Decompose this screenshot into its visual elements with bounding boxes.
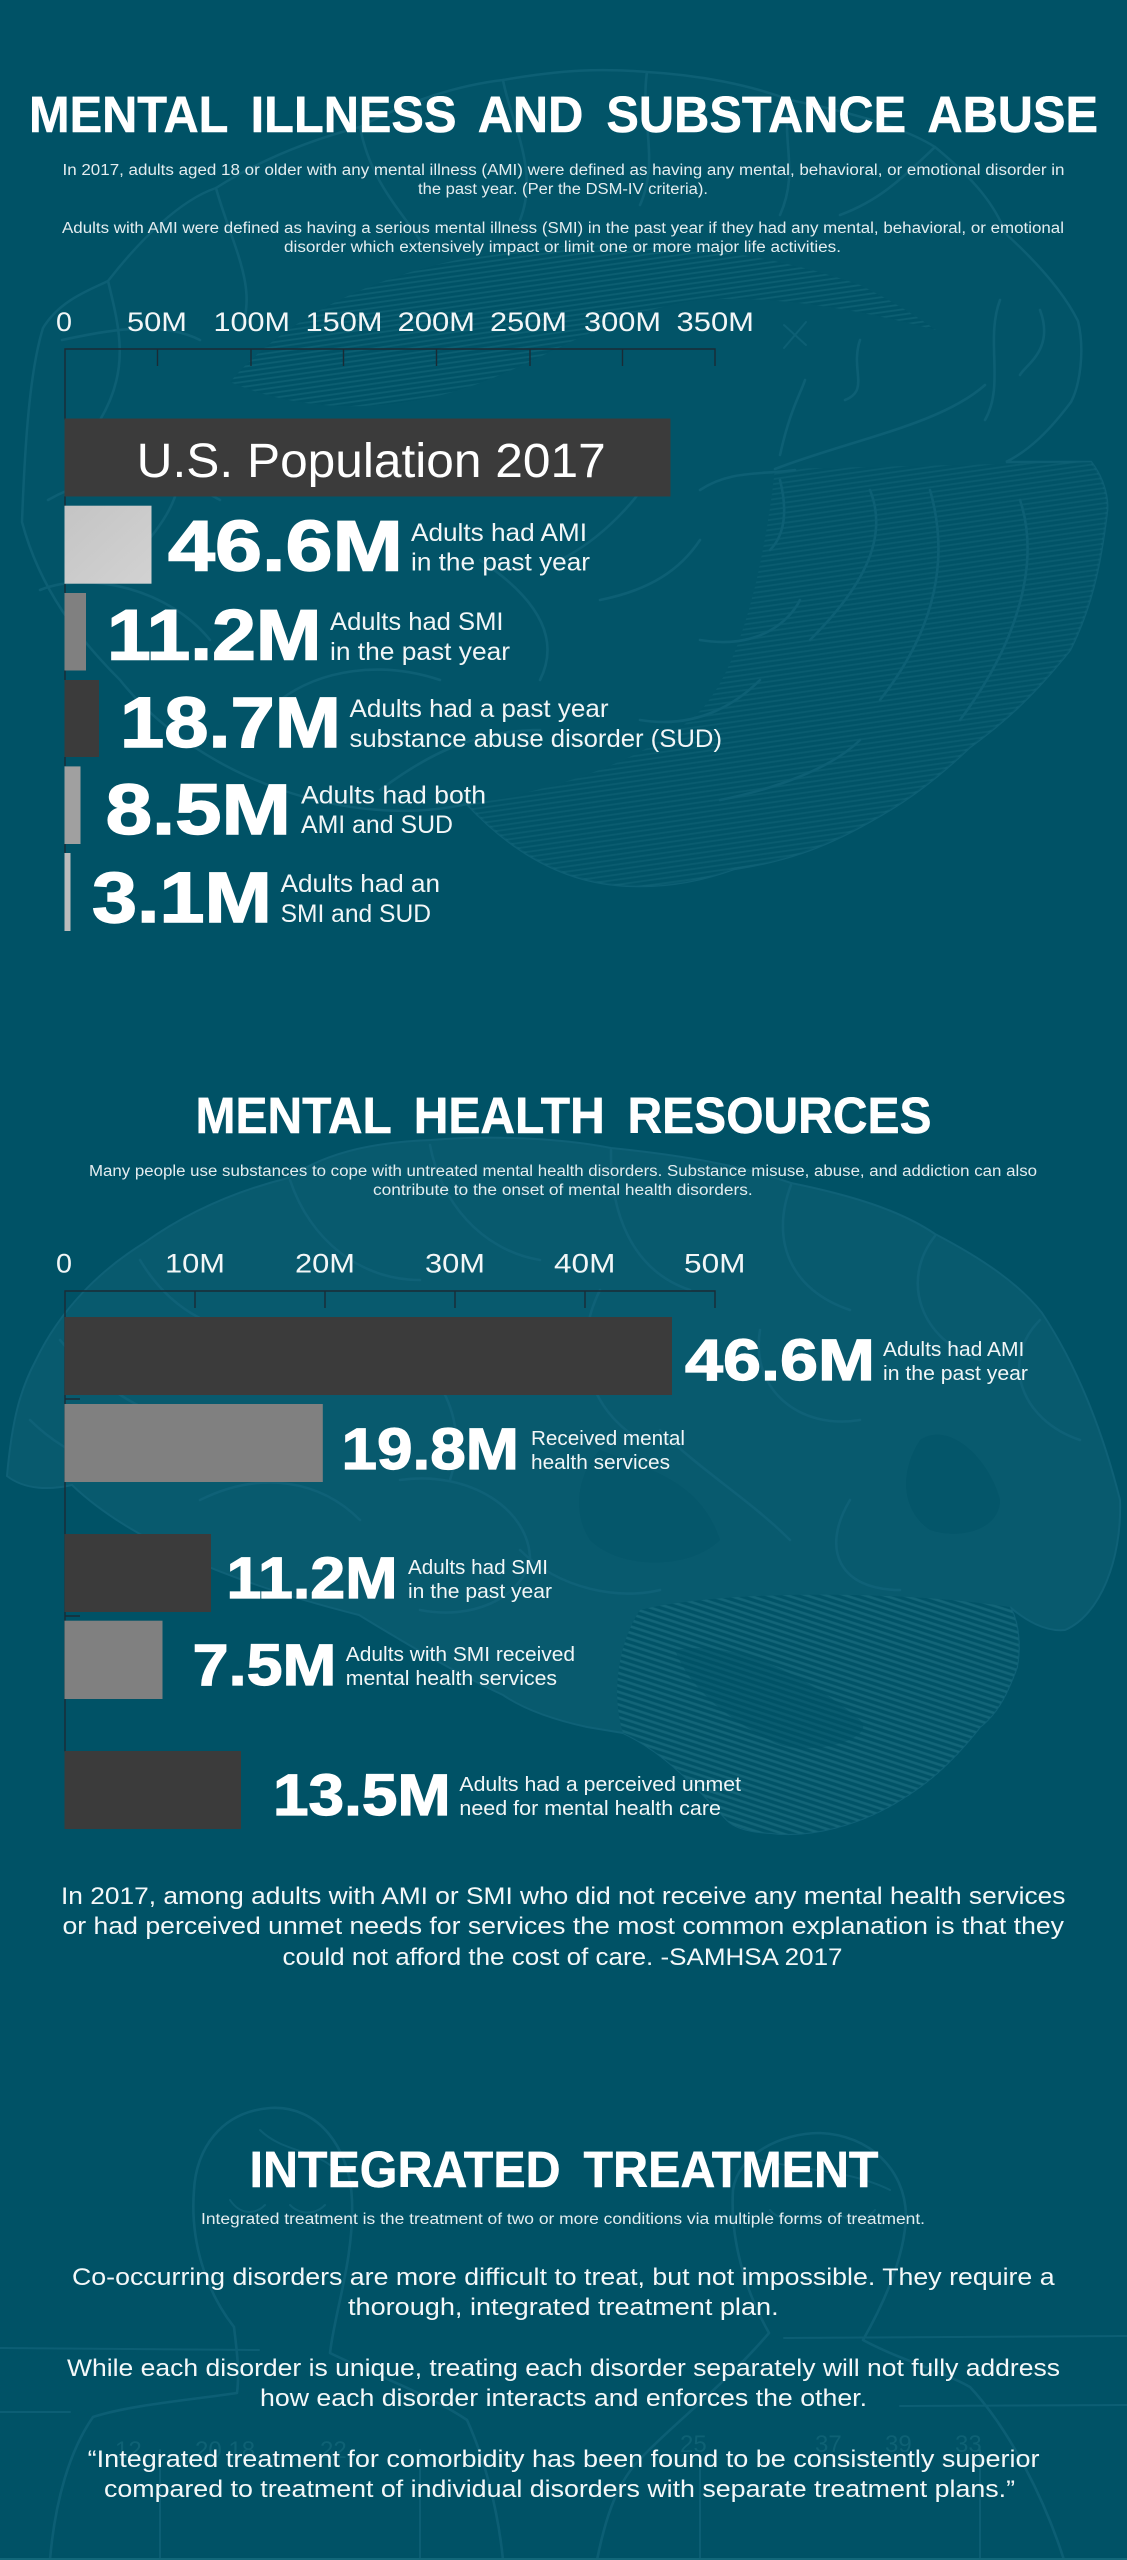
illustration: two engraved figures, section three: 37 bbox=[815, 2431, 842, 2458]
illustration: two engraved figures, section three: 25 bbox=[680, 2431, 707, 2458]
chart axis: adults scale: 10M bbox=[165, 1249, 225, 1279]
bar: U.S. population 2017 bbox=[64, 418, 670, 496]
heading: mental health resources: MENTAL HEALTH RESOURCES bbox=[196, 1087, 932, 1144]
bar: 46.6M adults had AMI bbox=[64, 506, 590, 586]
text block: AMI and SMI definitions: the past year. (Per the DSM-IV criteria). bbox=[418, 181, 708, 198]
quote: integrated treatment superiority: compared to treatment of individual disorders with separate treatment plans.” bbox=[104, 2476, 1015, 2503]
bar: 46.6M adults had AMI: 46.6M bbox=[685, 1328, 875, 1393]
chart axis: adults scale: 40M bbox=[554, 1249, 615, 1279]
chart axis: population scale: 150M bbox=[306, 307, 382, 337]
heading: integrated treatment: INTEGRATED TREATMENT bbox=[250, 2141, 878, 2198]
quote: integrated treatment superiority: “Integrated treatment for comorbidity has been found to be consistently superior bbox=[88, 2446, 1039, 2473]
bar: 11.2M adults had SMI: 11.2M bbox=[107, 596, 322, 676]
bar: 3.1M SMI and SUD: Adults had an bbox=[281, 870, 440, 898]
text block: substance use and mental health bbox=[89, 1163, 1037, 1199]
chart axis: population scale: 50M bbox=[127, 307, 187, 337]
illustration: two engraved figures, section three: 12 bbox=[115, 2437, 142, 2464]
chart axis: adults scale: 50M bbox=[684, 1249, 746, 1279]
text block: co-occurring disorders: Co-occurring disorders are more difficult to treat, but not impossible. They require a bbox=[72, 2264, 1055, 2291]
bar: 13.5M perceived unmet need bbox=[64, 1751, 741, 1829]
bar: 19.8M received mental health services: Received mental bbox=[531, 1427, 685, 1450]
bar: 8.5M both AMI and SUD: Adults had both bbox=[301, 782, 486, 810]
text block: substance use and mental health: Many people use substances to cope with untreated mental health disorders. Substance misuse, abuse, and addiction can also bbox=[89, 1163, 1037, 1180]
heading: mental illness and substance abuse: MENTAL ILLNESS AND SUBSTANCE ABUSE bbox=[29, 86, 1098, 143]
text block: AMI and SMI definitions bbox=[62, 162, 1064, 256]
bar: 7.5M adults with SMI received services: 7.5M bbox=[193, 1633, 336, 1698]
bar: 7.5M adults with SMI received services: mental health services bbox=[346, 1667, 557, 1690]
chart axis: adults scale: 20M bbox=[295, 1249, 355, 1279]
bar: 18.7M substance abuse disorder: Adults had a past year bbox=[350, 695, 608, 723]
bar: 3.1M SMI and SUD bbox=[64, 853, 440, 938]
chart axis: population scale: 250M bbox=[490, 307, 567, 337]
bar: 46.6M adults had AMI bbox=[64, 1317, 1028, 1395]
bar: 11.2M adults had SMI: Adults had SMI bbox=[408, 1556, 548, 1579]
bar: 46.6M adults had AMI: 46.6M bbox=[168, 508, 403, 586]
panel: integrated treatment bbox=[67, 2141, 1060, 2503]
chart axis: population scale bbox=[56, 307, 754, 853]
bar: 7.5M adults with SMI received services bbox=[64, 1621, 575, 1699]
text block: treating disorders separately: While each disorder is unique, treating each disorder separately will not fully address bbox=[67, 2355, 1060, 2382]
bar: 3.1M SMI and SUD: 3.1M bbox=[92, 859, 272, 938]
illustration: two engraved figures, section three: 39 bbox=[885, 2431, 912, 2458]
bar: 11.2M adults had SMI: Adults had SMI bbox=[330, 608, 504, 636]
bar: 3.1M SMI and SUD: SMI and SUD bbox=[281, 900, 431, 928]
illustration: two engraved figures, section three: 33 bbox=[955, 2431, 982, 2458]
text block: co-occurring disorders: thorough, integrated treatment plan. bbox=[348, 2294, 779, 2321]
bar: 8.5M both AMI and SUD bbox=[64, 766, 486, 850]
bar: 46.6M adults had AMI: Adults had AMI bbox=[883, 1338, 1024, 1361]
illustration: engraved brain, section two bbox=[7, 1138, 1120, 1834]
chart axis: adults scale: 30M bbox=[425, 1249, 485, 1279]
panel: mental illness and substance abuse bbox=[29, 86, 1098, 938]
chart axis: population scale: 350M bbox=[676, 307, 754, 337]
panel: mental health resources bbox=[56, 1087, 1065, 1971]
bar: 46.6M adults had AMI: in the past year bbox=[883, 1362, 1028, 1385]
bar: 19.8M received mental health services bbox=[64, 1404, 685, 1482]
text block: SAMHSA cost of care finding: In 2017, among adults with AMI or SMI who did not receive any mental health services bbox=[61, 1883, 1065, 1910]
bar: 19.8M received mental health services: health services bbox=[531, 1451, 670, 1474]
bar: 46.6M adults had AMI: Adults had AMI bbox=[411, 519, 587, 547]
text block: AMI and SMI definitions: disorder which extensively impact or limit one or more major life activities. bbox=[284, 239, 841, 256]
bar: 13.5M perceived unmet need: need for mental health care bbox=[459, 1797, 721, 1820]
illustration: two engraved figures, section three bbox=[0, 2108, 1127, 2560]
text block: co-occurring disorders bbox=[72, 2264, 1055, 2321]
bar: 18.7M substance abuse disorder: substance abuse disorder (SUD) bbox=[350, 725, 722, 753]
bar: 11.2M adults had SMI bbox=[64, 1534, 552, 1612]
chart axis: population scale: 300M bbox=[584, 307, 661, 337]
chart axis: adults scale bbox=[56, 1249, 746, 1752]
bar: 7.5M adults with SMI received services: Adults with SMI received bbox=[346, 1643, 575, 1666]
illustration: engraved brain, section one bbox=[22, 70, 1107, 886]
bar: 18.7M substance abuse disorder: 18.7M bbox=[120, 684, 341, 763]
chart axis: population scale: 200M bbox=[398, 307, 475, 337]
bar: 8.5M both AMI and SUD: AMI and SUD bbox=[301, 811, 453, 839]
quote: integrated treatment superiority bbox=[88, 2446, 1039, 2503]
bar: 11.2M adults had SMI bbox=[64, 593, 510, 676]
bar: 13.5M perceived unmet need: Adults had a perceived unmet bbox=[459, 1773, 741, 1796]
text block: integrated treatment definition: Integrated treatment is the treatment of two or more conditions via multiple forms of treatment. bbox=[201, 2211, 925, 2228]
text block: SAMHSA cost of care finding: or had perceived unmet needs for services the most common explanation is that they bbox=[62, 1913, 1065, 1940]
bar: 11.2M adults had SMI: in the past year bbox=[330, 638, 510, 666]
text block: AMI and SMI definitions: In 2017, adults aged 18 or older with any mental illness (AMI) were defined as having any mental, behavioral, or emotional disorder in bbox=[62, 162, 1064, 179]
bar: U.S. population 2017: U.S. Population 2017 bbox=[137, 435, 606, 488]
bar: 11.2M adults had SMI: 11.2M bbox=[226, 1546, 398, 1611]
chart axis: population scale: 100M bbox=[214, 307, 290, 337]
illustration: two engraved figures, section three: 20 18 bbox=[195, 2437, 255, 2464]
text block: treating disorders separately bbox=[67, 2355, 1060, 2412]
text block: AMI and SMI definitions: Adults with AMI were defined as having a serious mental illness (SMI) in the past year if they had any mental, behavioral, or emotional bbox=[62, 220, 1064, 237]
bar: 19.8M received mental health services: 19.8M bbox=[342, 1417, 519, 1482]
text block: treating disorders separately: how each disorder interacts and enforces the other. bbox=[260, 2385, 867, 2412]
bar: 13.5M perceived unmet need: 13.5M bbox=[273, 1763, 451, 1828]
bar: 18.7M substance abuse disorder bbox=[64, 680, 722, 763]
chart axis: adults scale: 0 bbox=[56, 1249, 72, 1279]
illustration: two engraved figures, section three: 22 bbox=[320, 2437, 347, 2464]
bar: 46.6M adults had AMI: in the past year bbox=[411, 548, 590, 576]
bar: 8.5M both AMI and SUD: 8.5M bbox=[106, 771, 291, 850]
bar: 11.2M adults had SMI: in the past year bbox=[408, 1580, 552, 1603]
chart axis: population scale: 0 bbox=[56, 307, 72, 337]
text block: SAMHSA cost of care finding bbox=[61, 1883, 1065, 1971]
text block: SAMHSA cost of care finding: could not afford the cost of care. -SAMHSA 2017 bbox=[282, 1944, 842, 1971]
text block: substance use and mental health: contribute to the onset of mental health disorders. bbox=[373, 1182, 753, 1199]
